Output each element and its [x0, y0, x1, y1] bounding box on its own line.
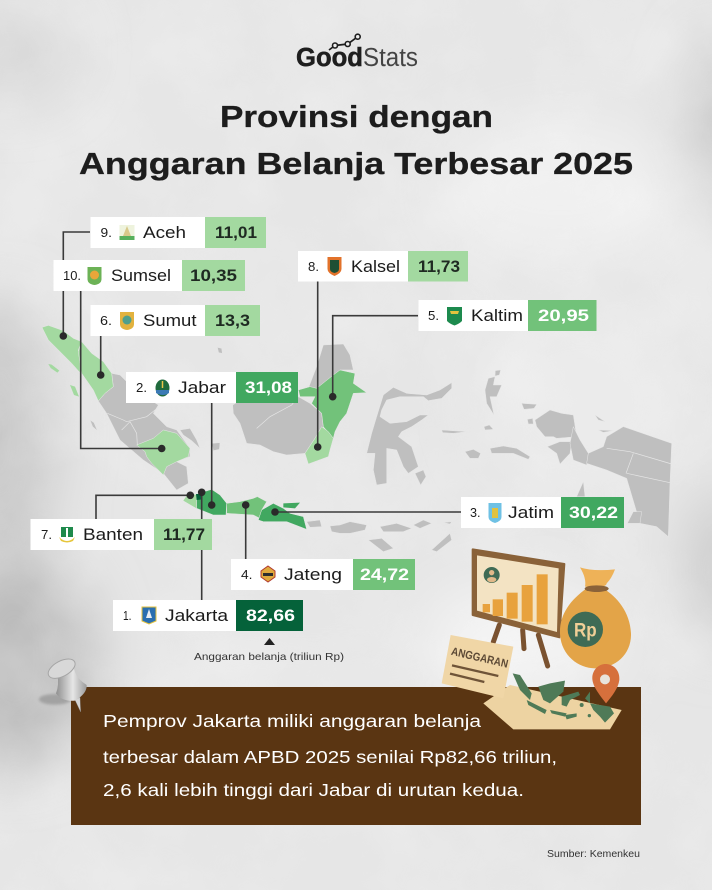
connector lines and location dots [60, 232, 461, 600]
label: Banten: 11,77 [163, 526, 205, 544]
label: Sumsel [54, 260, 245, 291]
label: Jabar [126, 372, 298, 403]
label: Banten [30, 519, 212, 550]
money bag [560, 567, 631, 668]
label: Jatim: 30,22 [569, 504, 618, 522]
label: Sumsel: Sumsel [111, 267, 171, 285]
province: Jatim [258, 503, 307, 529]
label: Kaltim [418, 300, 596, 331]
label: Kaltim: Kaltim [471, 307, 523, 325]
province: Banten [183, 493, 197, 508]
label: Sumut [90, 305, 260, 336]
label: Aceh [90, 217, 266, 248]
province: Jakarta [196, 494, 202, 500]
label: Kalsel: Kalsel [351, 258, 400, 276]
province: Sumsel [137, 430, 190, 475]
easel legs [493, 625, 548, 666]
Sumatra and grey provinces [90, 347, 222, 490]
label: Jabar: 31,08 [245, 379, 292, 397]
icon: push pin [39, 655, 87, 712]
illustration: budget presentation, money bag and map [442, 549, 631, 729]
label: Kaltim: 20,95 [538, 307, 589, 325]
legend: budget unit [194, 638, 344, 663]
money bag: Rp [574, 621, 597, 642]
panel: summary callout: terbesar dalam APBD 2025 senilai Rp82,66 triliun, [103, 747, 557, 767]
label: Jateng [231, 559, 415, 590]
presentation board with bar chart [473, 549, 564, 637]
label: Jakarta: Jakarta [165, 607, 229, 625]
label: Jatim: Jatim [508, 504, 554, 522]
label: Sumsel: 10,35 [190, 267, 237, 285]
label: Kalsel: 11,73 [418, 258, 460, 276]
panel: summary callout: 2,6 kali lebih tinggi dari Jabar di urutan kedua. [103, 780, 524, 800]
province: Jabar [197, 489, 227, 515]
base with map of Indonesia [483, 673, 622, 729]
source note: Sumber: Kemenkeu [547, 849, 640, 860]
label: Jateng: Jateng [284, 566, 342, 584]
label: Sumut: 6. [100, 313, 112, 328]
title: Provinsi dengan [220, 100, 493, 134]
islands near Sumatra [48, 364, 79, 397]
label: Sumut: Sumut [143, 312, 197, 330]
label: Jabar: 2. [136, 380, 147, 395]
logo: GoodStats: Stats [363, 44, 418, 72]
label: Sumut: 13,3 [215, 312, 250, 330]
label: Aceh: 9. [100, 225, 112, 240]
label: Kalsel [298, 251, 468, 282]
Kalimantan grey provinces [233, 344, 353, 455]
location pin [592, 664, 619, 703]
Madura island [283, 503, 300, 508]
title [79, 100, 633, 181]
panel: summary callout [71, 687, 641, 825]
province: Kaltim [298, 370, 367, 438]
legend: budget unit: Anggaran belanja (triliun Rp) [194, 651, 344, 663]
label: Aceh: 11,01 [215, 224, 257, 242]
logo: GoodStats [296, 34, 418, 72]
logo: GoodStats: Good [296, 44, 363, 72]
province: Sumut [78, 342, 113, 401]
label: Banten: 7. [41, 527, 52, 542]
label: Aceh: Aceh [143, 224, 186, 242]
label: Jakarta: 1. [123, 608, 132, 623]
province: Aceh [42, 325, 82, 373]
map of Indonesia [42, 325, 672, 552]
Java provinces [183, 489, 307, 529]
card: ANGGARAN [442, 635, 513, 698]
label: Jatim [461, 497, 624, 528]
label: Jateng: 24,72 [360, 566, 409, 584]
label: Kaltim: 5. [428, 308, 439, 323]
eastern Indonesia islands [307, 370, 672, 552]
label: Jatim: 3. [470, 505, 480, 520]
label: Jakarta: 82,66 [246, 607, 295, 625]
label: Jabar: Jabar [178, 379, 227, 397]
province: Jateng [227, 497, 267, 518]
label: Jateng: 4. [241, 567, 252, 582]
label: Kalsel: 8. [308, 259, 319, 274]
label: Jakarta [113, 600, 303, 631]
panel: summary callout: Pemprov Jakarta miliki anggaran belanja [103, 711, 481, 731]
card: ANGGARAN: ANGGARAN [450, 646, 509, 671]
province: Kalsel [305, 427, 333, 464]
label: Banten: Banten [83, 526, 143, 544]
label: Sumsel: 10. [63, 268, 81, 283]
title: Anggaran Belanja Terbesar 2025 [79, 147, 633, 181]
